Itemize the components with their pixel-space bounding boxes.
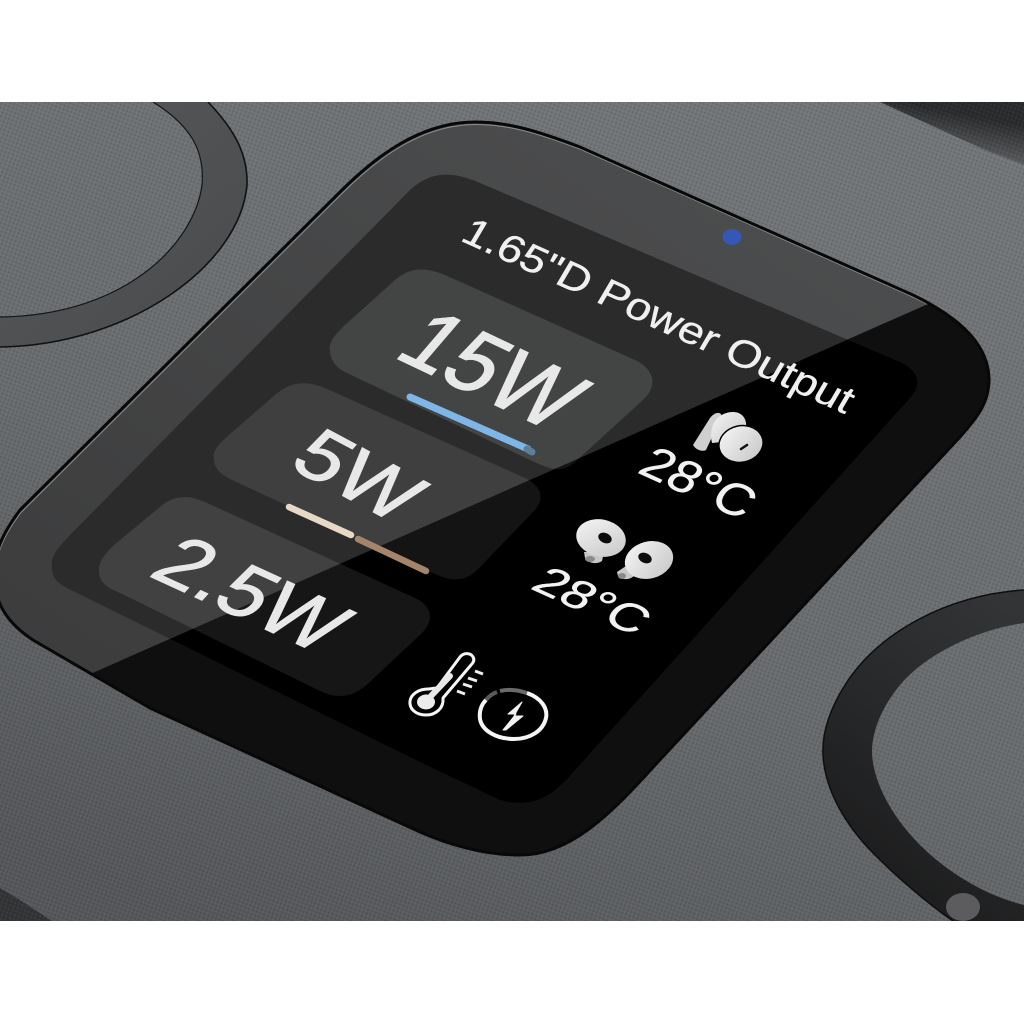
panel: textured charger surface (0, 102, 1024, 921)
charging ring: bottom right (823, 590, 1024, 921)
temperature: earbuds pro: 28°C (630, 437, 767, 529)
bar: 5W two-tone (289, 507, 426, 571)
ring indicator button (946, 893, 980, 921)
icon: earbuds pro (693, 412, 767, 467)
value: 2.5W: 2.5W (135, 522, 368, 668)
temperature: earbuds: 28°C (522, 559, 662, 644)
bezel edge line (0, 122, 989, 855)
status LED (722, 229, 742, 245)
device display bezel (0, 122, 989, 855)
glass glare overlay (0, 124, 928, 673)
power tiles on dark side (99, 270, 652, 696)
icon: thermometer (410, 654, 483, 715)
bar: 15W blue (410, 397, 532, 452)
charging ring: top left (0, 102, 247, 347)
icon: charging ring with bolt (480, 690, 546, 739)
value: 15W: 15W (379, 293, 607, 447)
inner screen (52, 175, 917, 803)
value: 5W: 5W (276, 414, 442, 537)
title: 1.65"D Power Output (455, 209, 863, 422)
icon: earbuds (573, 515, 677, 584)
